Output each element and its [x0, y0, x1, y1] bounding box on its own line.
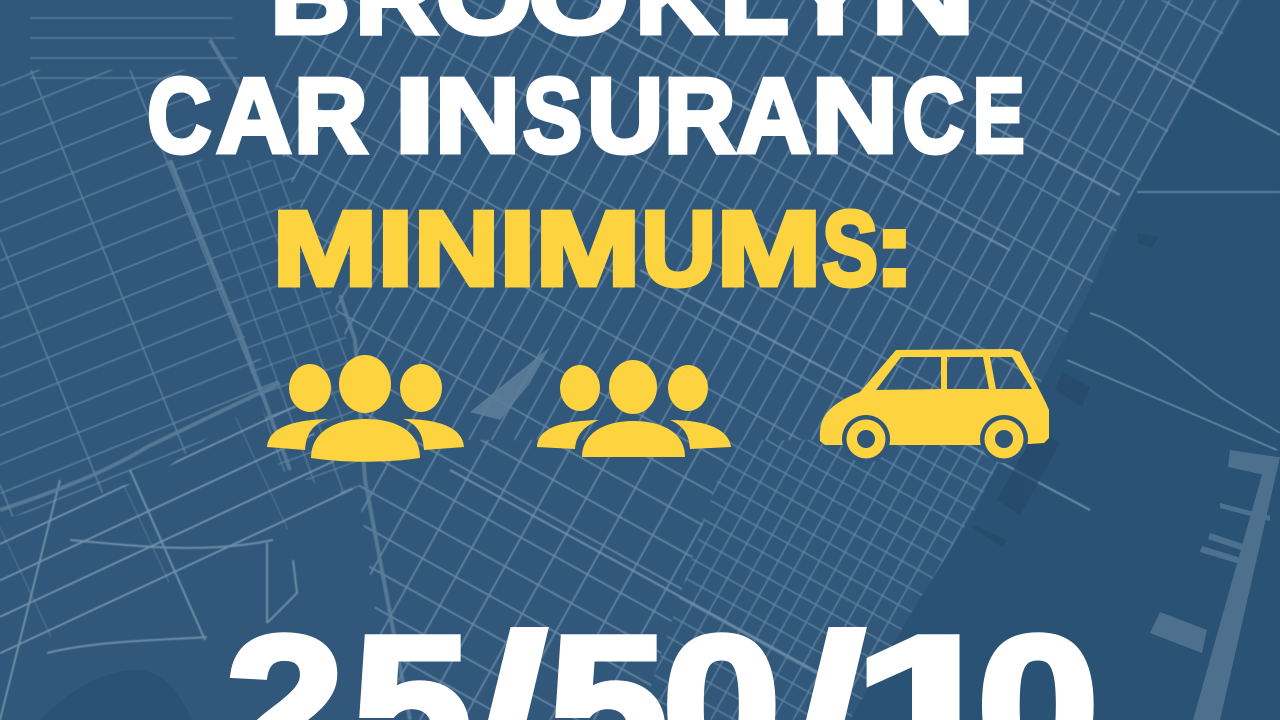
subtitle: minimums: N: [414, 190, 499, 308]
water: bay: [40, 670, 192, 720]
icon: people group, bodily injury per accident: [537, 360, 731, 457]
subtitle: minimums: U: [641, 190, 716, 308]
title: car insurance: I: [394, 57, 435, 175]
icon: car, property damage: [820, 349, 1049, 463]
subtitle: minimums: M: [717, 190, 821, 308]
title: car insurance: N: [812, 57, 898, 175]
wide avenues: [0, 40, 410, 720]
title: car insurance: U: [587, 57, 663, 175]
title: car insurance: A: [216, 57, 292, 175]
title: car insurance: C: [147, 57, 211, 175]
subtitle: minimums: :: [874, 190, 915, 308]
subtitle: minimums: M: [273, 190, 377, 308]
title: car insurance: R: [664, 57, 735, 175]
title: car insurance: A: [736, 57, 810, 175]
east roads: [1067, 192, 1280, 450]
subtitle: minimums: I: [377, 190, 414, 308]
dark waterfront blocks: [973, 233, 1158, 547]
park: [470, 347, 550, 420]
subtitle: minimums: I: [499, 190, 536, 308]
subtitle: minimums: S: [822, 190, 878, 308]
title: car insurance: E: [973, 57, 1025, 175]
subtitle: minimums: M: [536, 190, 640, 308]
icon: people group, bodily injury per person: [267, 355, 464, 462]
water: east river: [850, 0, 1280, 720]
title: car insurance: S: [523, 57, 582, 175]
pier structures: [1150, 450, 1280, 720]
title: car insurance: N: [435, 57, 520, 175]
title: car insurance: C: [903, 57, 964, 175]
title: car insurance: R: [294, 57, 368, 175]
